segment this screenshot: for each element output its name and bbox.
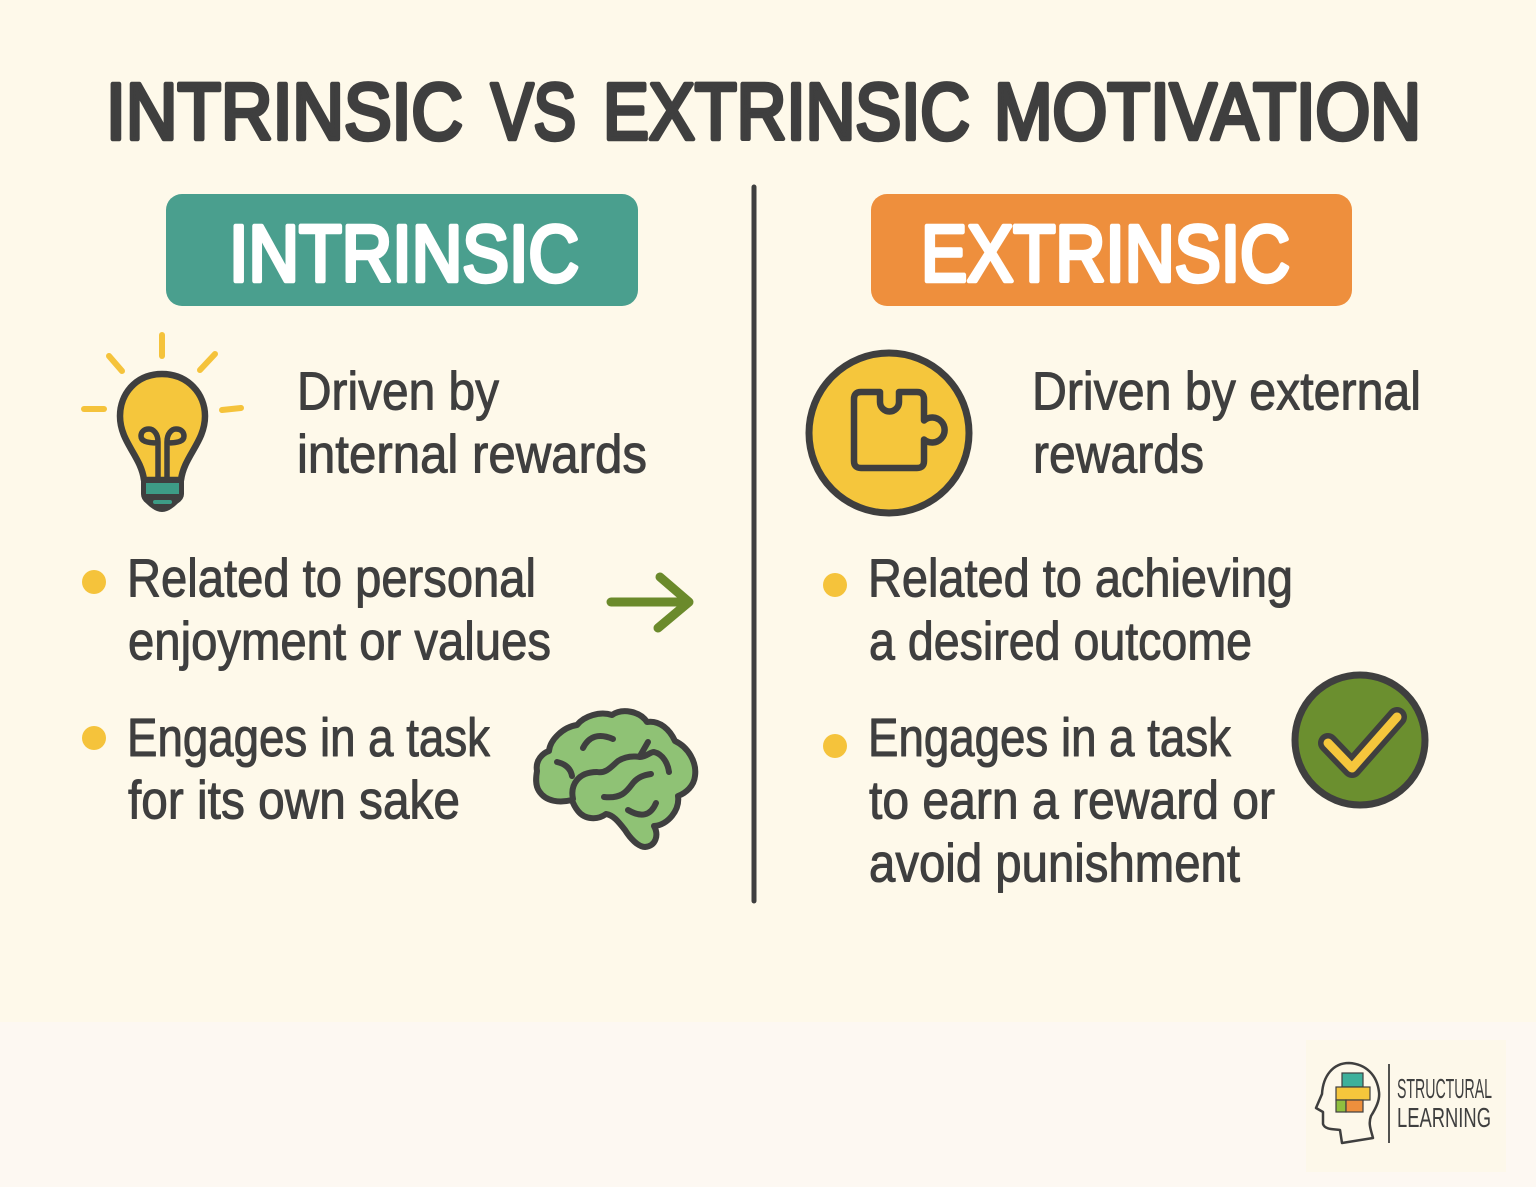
logo wordmark xyxy=(1397,1073,1492,1133)
text: driven by external rewards: Driven by external xyxy=(1032,362,1421,422)
icon: puzzle piece xyxy=(809,353,969,513)
logo head icon xyxy=(1316,1063,1379,1143)
intrinsic badge xyxy=(166,194,638,306)
icon: light bulb xyxy=(84,335,241,509)
bullet: earn a reward: avoid punishment xyxy=(869,834,1240,894)
icon: arrow xyxy=(611,577,689,628)
icon: check mark xyxy=(1295,675,1425,805)
bullet: earn a reward: to earn a reward or xyxy=(869,770,1275,830)
text: driven by external rewards xyxy=(1032,362,1421,484)
title: INTRINSIC xyxy=(106,67,463,156)
logo wordmark: LEARNING xyxy=(1397,1102,1491,1133)
extrinsic badge: EXTRINSIC xyxy=(921,209,1290,298)
bullet: personal enjoyment xyxy=(82,548,551,672)
bullet: earn a reward xyxy=(823,708,1275,894)
text: driven by external rewards: rewards xyxy=(1033,424,1204,484)
bullet: desired outcome: Related to achieving xyxy=(868,548,1293,608)
bullet: desired outcome: a desired outcome xyxy=(869,612,1252,672)
text: driven by internal rewards: internal rewards xyxy=(297,424,647,484)
logo: structural learning xyxy=(1306,1040,1506,1172)
title: VS xyxy=(491,67,576,156)
icon: brain xyxy=(536,711,695,847)
panel: intrinsic xyxy=(82,194,695,847)
bullet: personal enjoyment: enjoyment or values xyxy=(128,612,551,672)
title xyxy=(106,67,1421,156)
intrinsic badge: INTRINSIC xyxy=(229,209,579,298)
panel: extrinsic xyxy=(809,194,1425,894)
text: driven by internal rewards: Driven by xyxy=(297,362,499,422)
title: MOTIVATION xyxy=(994,67,1421,156)
bullet: personal enjoyment: Related to personal xyxy=(127,548,536,608)
text: driven by internal rewards xyxy=(297,362,647,484)
center divider xyxy=(752,187,756,901)
bullet: task for its own sake: Engages in a task xyxy=(127,708,491,768)
bullet: desired outcome xyxy=(823,548,1293,672)
bullet: task for its own sake xyxy=(82,708,491,830)
bullet: earn a reward: Engages in a task xyxy=(868,708,1232,768)
title: EXTRINSIC xyxy=(603,67,970,156)
bullet: task for its own sake: for its own sake xyxy=(128,770,460,830)
